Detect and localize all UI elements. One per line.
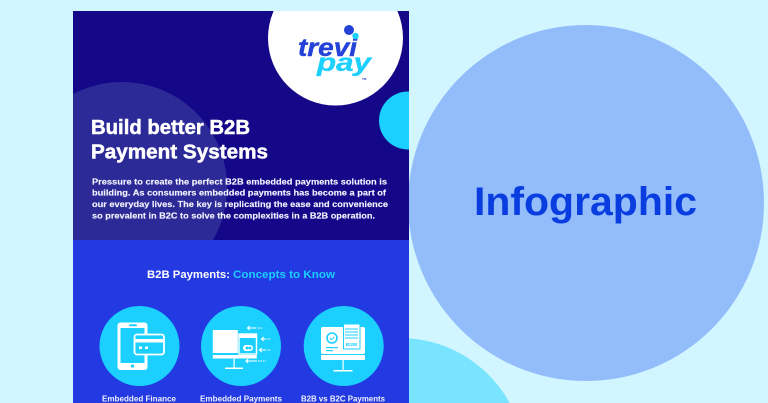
logo: TreviPay: trevi [298, 34, 358, 62]
section heading: B2B Payments: [147, 269, 230, 281]
title [91, 117, 268, 164]
section heading: Concepts to Know [233, 269, 335, 281]
label: Infographic: Infographic [474, 180, 697, 224]
panel: header [73, 11, 409, 240]
icon: embedded payments [201, 306, 281, 386]
background circle: bottom [275, 338, 525, 403]
intro text: our everyday lives. The key is replicating the ease and convenience [92, 199, 388, 209]
icon: B2B vs B2C payments [304, 306, 384, 386]
intro text [92, 177, 388, 221]
title: Build better B2B [91, 117, 250, 139]
icon: B2B vs B2C payments: B2B [346, 342, 358, 348]
section heading [148, 270, 335, 280]
intro text: building. As consumers embedded payments has become a part of [92, 188, 386, 198]
logo: TreviPay [268, 11, 403, 106]
infographic panel [73, 11, 409, 403]
title: Payment Systems [91, 142, 268, 164]
concept labels [102, 396, 385, 403]
panel: concepts [73, 240, 409, 403]
decorative light circle [73, 82, 227, 240]
intro text: Pressure to create the perfect B2B embedded payments solution is [92, 177, 387, 187]
logo: TreviPay: pay [316, 49, 372, 77]
accent circle [379, 92, 409, 150]
icon: embedded finance [100, 306, 180, 386]
background circle: large [408, 25, 764, 381]
logo: TreviPay: TM [362, 77, 367, 81]
intro text: so prevalent in B2C to solve the complexities in a B2B operation. [92, 211, 375, 221]
